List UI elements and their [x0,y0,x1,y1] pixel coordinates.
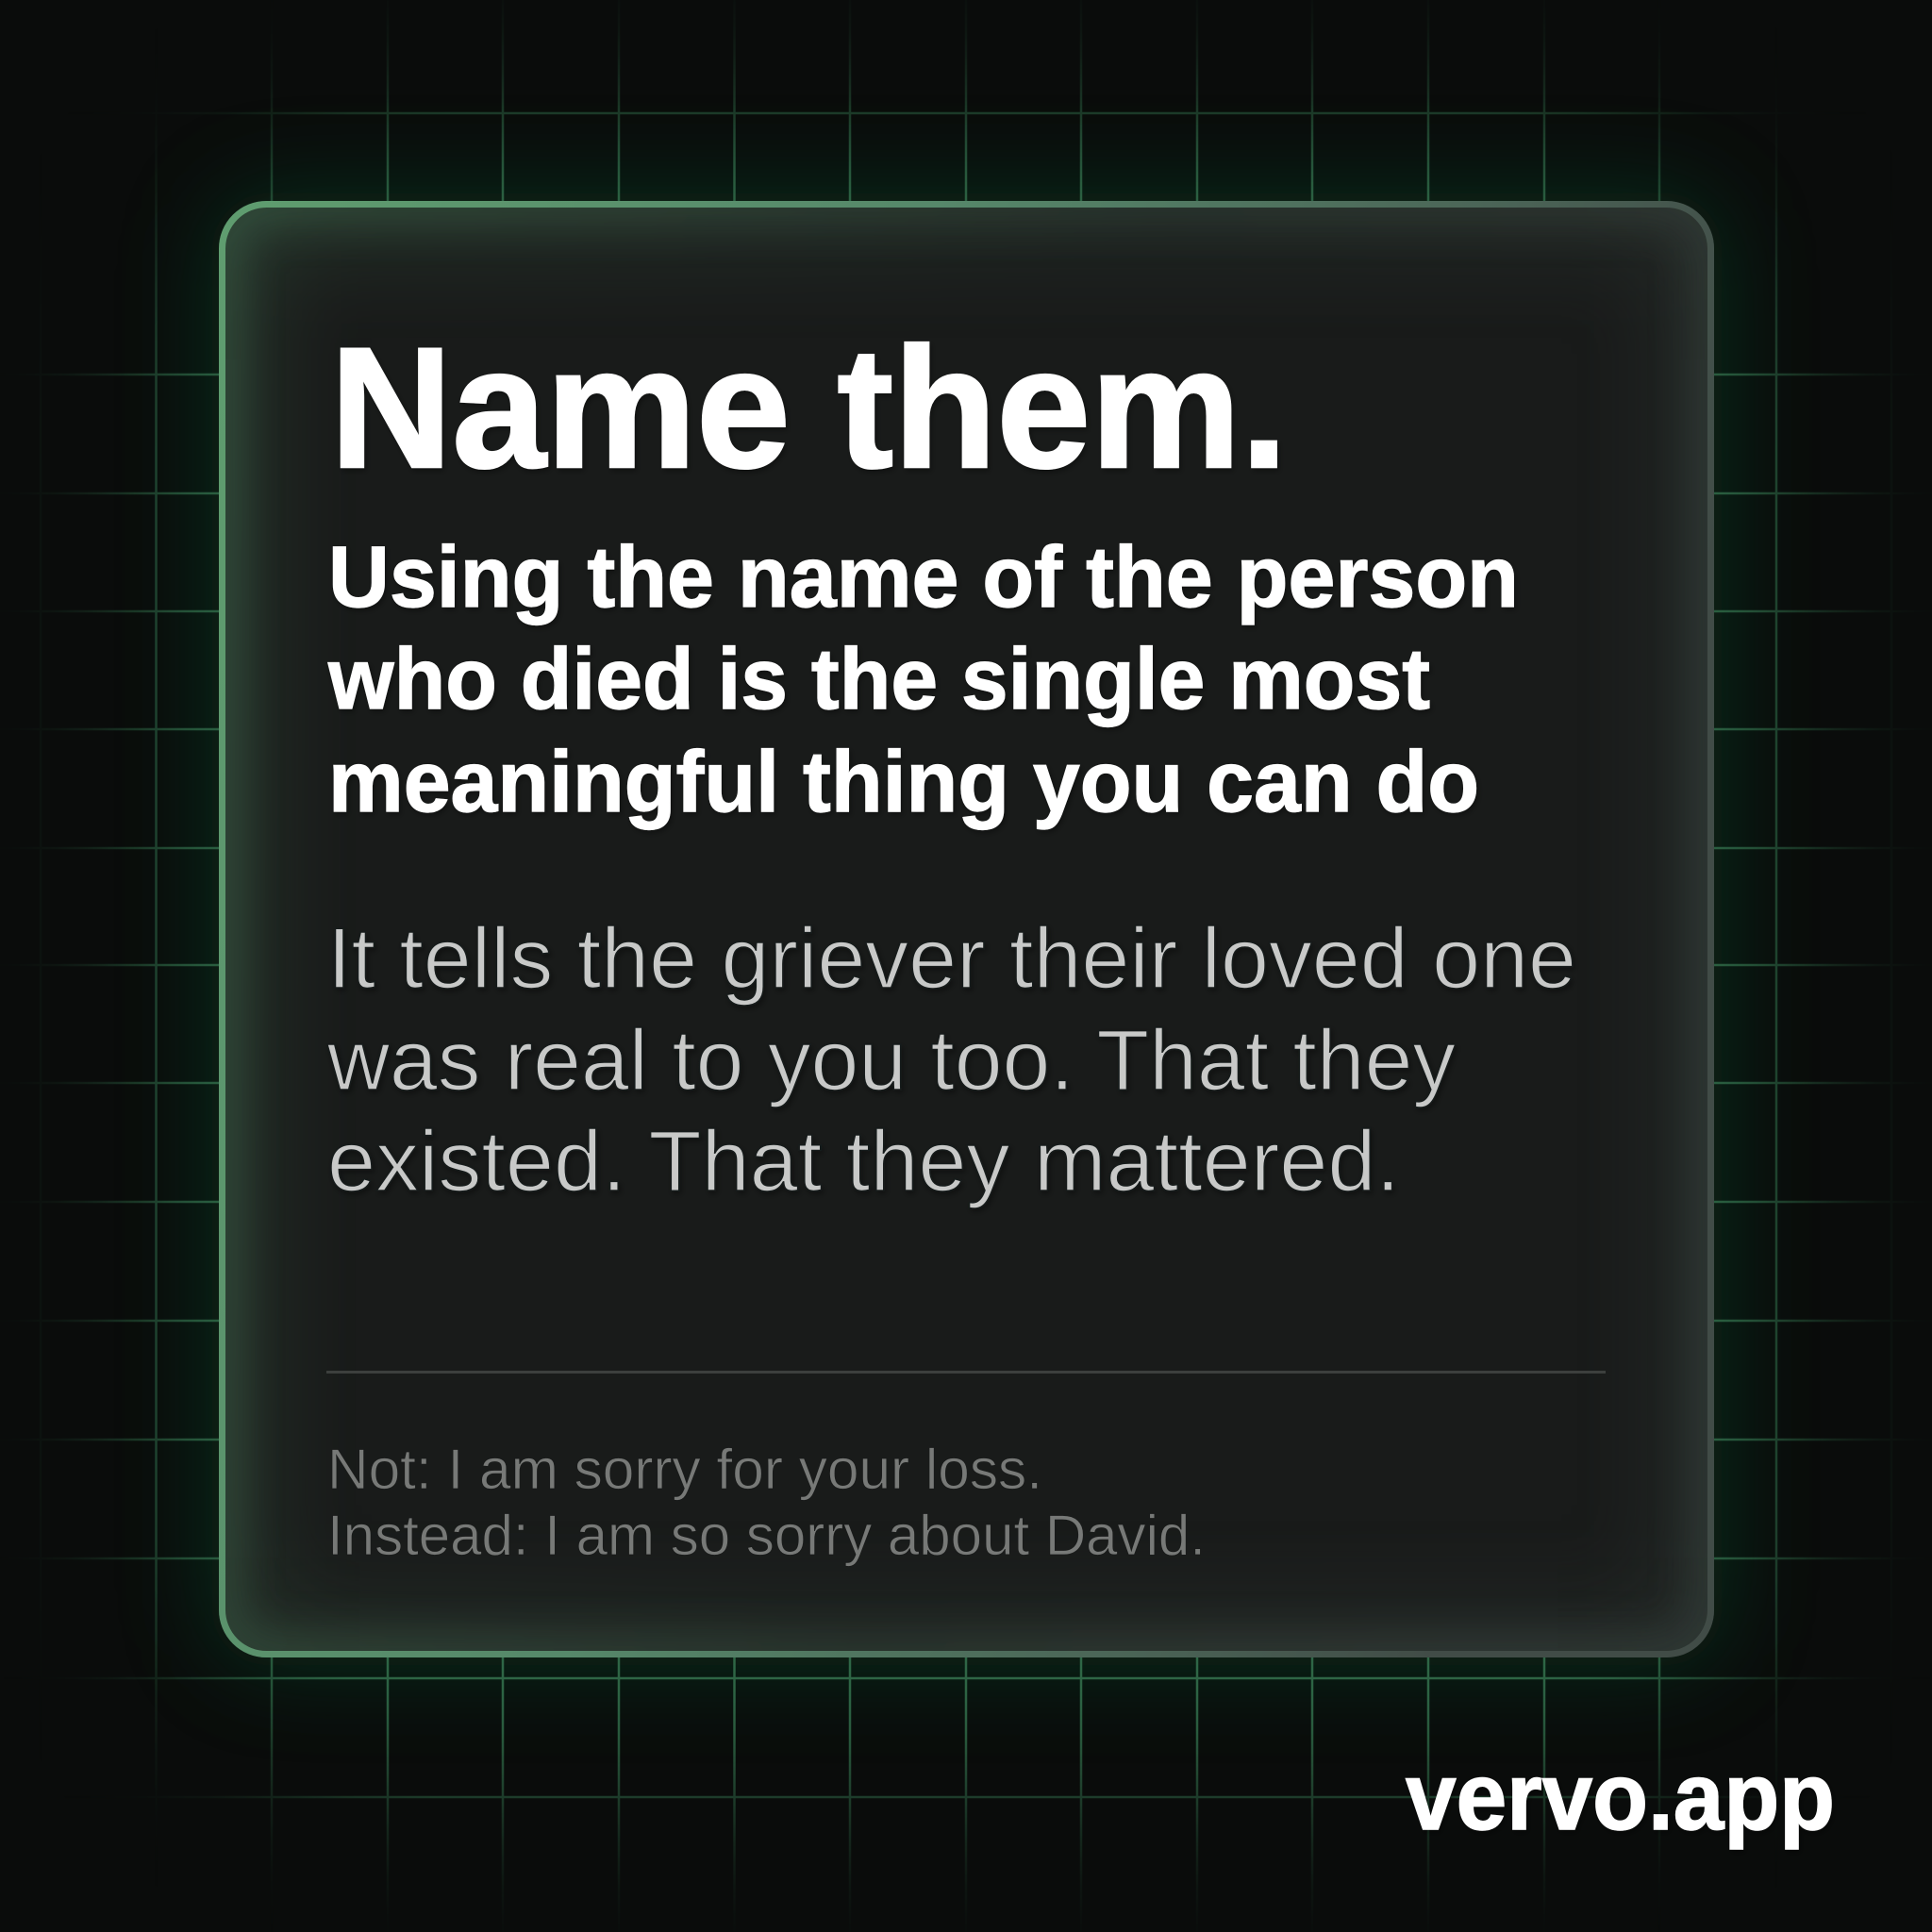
green glow behind card [212,193,1722,1665]
panel: message card [219,201,1714,1657]
body text: existed. That they mattered. [327,1114,1400,1209]
subheading: who died is the single most [327,631,1430,727]
body text: It tells the griever their loved one [327,911,1576,1007]
body text [326,911,1576,1209]
subheading: Using the name of the person [328,529,1519,625]
comparison text [327,1438,1206,1567]
subheading [327,529,1519,830]
body text: was real to you too. That they [326,1013,1457,1108]
comparison text: Instead: I am so sorry about David. [327,1504,1206,1567]
brand url: vervo.app [1406,1744,1835,1850]
divider [326,1371,1606,1374]
comparison text: Not: I am sorry for your loss. [327,1438,1042,1501]
subheading: meaningful thing you can do [328,734,1479,830]
title: Name them. [330,311,1288,504]
